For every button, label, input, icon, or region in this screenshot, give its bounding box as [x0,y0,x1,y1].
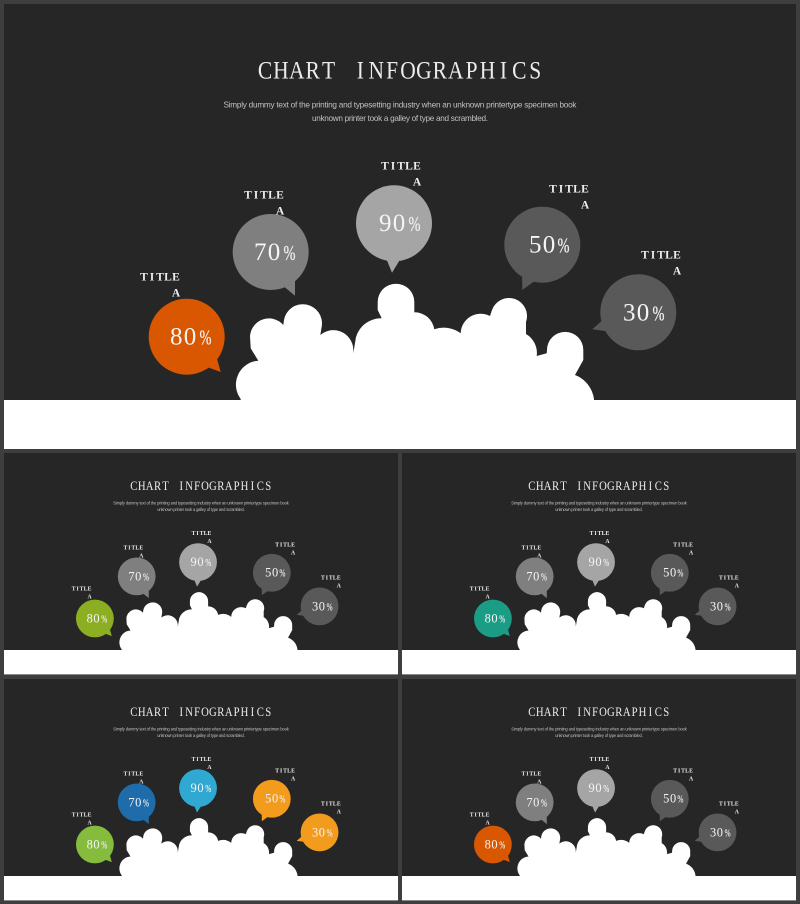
bubble: 90%: A [413,176,422,188]
bubble: 80% [72,587,114,637]
bubble: 30%: TITLE [321,802,341,808]
bubble: 70%: 70 [128,795,142,809]
bubble: 30%: % [327,828,333,839]
bubble: 70%: TITLE [123,772,143,778]
panel: main slide [4,4,796,449]
subtitle: unknown printer took a galley of type and scrambled. [555,733,643,738]
audience silhouette [119,592,298,651]
bubble: 50% [253,769,296,821]
bubble: 70%: 70 [254,239,281,266]
bubble: 80%: A [485,595,490,601]
title: CHART INFOGRAPHICS [130,704,271,719]
bubble: 80%: 80 [87,611,100,625]
bubble: 70%: A [139,554,144,560]
subtitle: unknown printer took a galley of type and scrambled. [555,507,643,512]
title: CHART INFOGRAPHICS [130,478,271,493]
bubble: 30%: TITLE [641,249,681,261]
bubble: 50%: A [291,551,296,557]
bubble: 30%: 30 [710,825,724,839]
bubble: 90%: TITLE [590,531,610,537]
bubble: 70% [118,772,156,824]
bubble: 30%: A [337,809,342,815]
subtitle [224,100,577,123]
bubble: 70%: TITLE [123,546,143,552]
bubble: 50%: 50 [663,792,677,806]
title: CHART INFOGRAPHICS [528,704,669,719]
bubble: 90% [179,531,217,587]
bubble: 80%: 80 [87,837,100,851]
bubble: 50%: % [279,569,286,580]
bubble: 30%: A [673,265,682,277]
bubble: 90% [356,160,432,273]
bubble: 50%: % [279,795,286,806]
bubble: 30%: TITLE [321,576,341,582]
bubble: 30%: % [327,602,333,613]
bubble: 80% [470,587,512,637]
bubble: 30%: A [337,583,342,589]
audience silhouette [517,818,696,877]
panel: multicolour variant [4,679,398,900]
bubble: 50%: TITLE [549,183,589,195]
bubble: 80%: 80 [485,611,498,625]
bubble: 70%: % [143,572,149,583]
bubble: 70% [233,189,309,296]
bubble: 80% [140,272,225,375]
bubble: 70%: A [537,554,542,560]
bubble: 70%: 70 [526,795,540,809]
bubble: 70% [516,546,554,598]
bubble: 90% [179,757,217,813]
bubble: 30% [695,576,740,625]
bubble: 90% [577,531,615,587]
bubble: 30%: 30 [312,599,326,613]
title: CHART INFOGRAPHICS [528,478,669,493]
bubble: 80%: A [87,595,92,601]
bubble: 50%: A [689,777,694,783]
bubble: 90%: % [205,558,211,569]
bubble: 50% [504,183,590,290]
bubble: 80% [470,813,512,863]
bubble: 30% [297,576,342,625]
bubble: 30%: 30 [312,825,326,839]
bubble: 90%: TITLE [590,757,610,763]
bubble: 50%: A [581,199,590,211]
bubble: 30%: TITLE [719,802,739,808]
bubble: 50%: A [689,551,694,557]
bubble: 50%: 50 [529,232,556,259]
bubble: 50% [253,543,296,595]
subtitle [511,726,688,738]
bubble: 50%: TITLE [275,543,295,549]
subtitle: Simply dummy text of the printing and typesetting industry when an unknown printertype specimen book [511,500,688,505]
bubble: 30%: A [735,809,740,815]
subtitle [511,500,688,512]
bubble: 30%: % [652,301,664,325]
bubble: 90%: A [605,765,610,771]
bubble: 70%: % [143,798,149,809]
bubble: 70%: A [276,205,285,217]
bubble: 90%: 90 [191,781,204,795]
subtitle: Simply dummy text of the printing and typesetting industry when an unknown printertype specimen book [113,726,290,731]
bubble: 90%: % [205,784,211,795]
bubble: 90%: % [408,212,420,236]
bubble: 80%: A [485,821,490,827]
bubble: 80%: TITLE [72,587,92,593]
bubble: 50% [651,543,694,595]
bubble: 70%: TITLE [521,772,541,778]
bubble: 80%: TITLE [140,272,180,284]
subtitle: Simply dummy text of the printing and typesetting industry when an unknown printertype specimen book [511,726,688,731]
bubble: 50%: % [558,234,570,258]
bubble: 90%: A [207,539,212,545]
bubble: 30%: TITLE [719,576,739,582]
bubble: 30%: 30 [623,299,650,326]
bubble: 70%: A [139,780,144,786]
bubble: 70%: A [537,780,542,786]
bubble: 50%: TITLE [673,769,693,775]
audience silhouette [119,818,298,877]
bubble: 30% [695,802,740,851]
bubble: 90%: 90 [379,210,406,237]
bubble: 30%: % [725,828,731,839]
subtitle [113,726,290,738]
bubble: 90%: TITLE [192,531,212,537]
bubble: 30%: 30 [710,599,724,613]
bubble: 50%: TITLE [673,543,693,549]
bubble: 70%: % [541,798,547,809]
bubble: 30% [297,802,342,851]
bubble: 30% [592,249,682,350]
bubble: 80%: A [87,821,92,827]
subtitle: Simply dummy text of the printing and typesetting industry when an unknown printertype specimen book [224,100,577,110]
bubble: 50% [651,769,694,821]
bubble: 70%: TITLE [521,546,541,552]
bubble: 70% [516,772,554,824]
bubble: 90% [577,757,615,813]
panel: orange variant [402,679,796,900]
bubble: 80%: % [200,326,212,350]
bubble: 90%: 90 [191,555,204,569]
bubble: 80%: % [101,614,107,625]
bubble: 90%: A [605,539,610,545]
subtitle [113,500,290,512]
bubble: 50%: 50 [265,792,279,806]
bubble: 90%: % [603,784,609,795]
title: CHART INFOGRAPHICS [258,57,541,85]
bubble: 70%: TITLE [244,189,284,201]
bubble: 80%: A [172,288,181,300]
audience silhouette [517,592,696,651]
bubble: 30%: A [735,583,740,589]
subtitle: unknown printer took a galley of type and scrambled. [312,114,488,123]
subtitle: Simply dummy text of the printing and typesetting industry when an unknown printertype specimen book [113,500,290,505]
bubble: 70%: 70 [526,569,540,583]
panel: green variant [4,453,398,674]
bubble: 90%: TITLE [381,160,421,172]
bubble: 90%: 90 [589,555,602,569]
bubble: 80%: TITLE [470,813,490,819]
bubble: 70%: 70 [128,569,142,583]
bubble: 80%: % [499,840,505,851]
bubble: 90%: A [207,765,212,771]
bubble: 80% [72,813,114,863]
bubble: 50%: 50 [663,566,677,580]
subtitle: unknown printer took a galley of type and scrambled. [157,507,245,512]
bubble: 80%: TITLE [470,587,490,593]
bubble: 50%: % [677,569,684,580]
bubble: 90%: % [603,558,609,569]
bubble: 90%: 90 [589,781,602,795]
bubble: 50%: A [291,777,296,783]
bubble: 80%: 80 [485,837,498,851]
bubble: 80%: 80 [170,324,197,351]
bubble: 50%: % [677,795,684,806]
bubble: 30%: % [725,602,731,613]
bubble: 50%: TITLE [275,769,295,775]
bubble: 70%: % [284,241,296,265]
bubble: 90%: TITLE [192,757,212,763]
bubble: 80%: TITLE [72,813,92,819]
audience silhouette [236,284,594,401]
bubble: 80%: % [101,840,107,851]
panel: teal variant [402,453,796,674]
bubble: 70%: % [541,572,547,583]
subtitle: unknown printer took a galley of type and scrambled. [157,733,245,738]
bubble: 50%: 50 [265,566,279,580]
bubble: 70% [118,546,156,598]
bubble: 80%: % [499,614,505,625]
